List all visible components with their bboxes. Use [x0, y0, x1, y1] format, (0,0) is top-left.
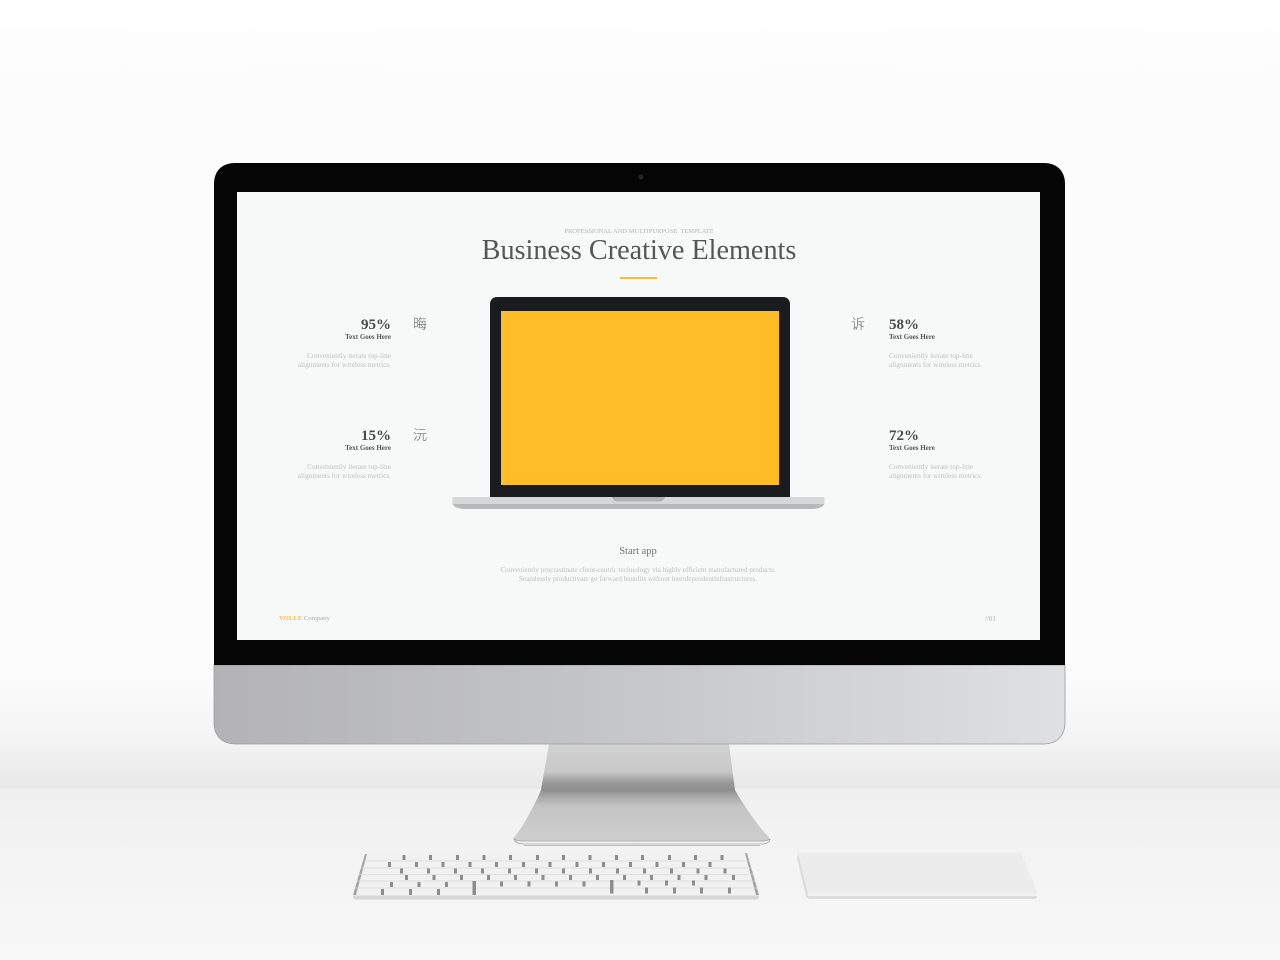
58% description: [889, 351, 982, 369]
95% description: [298, 351, 391, 369]
58% description: alignments for wireless metrics.: [889, 360, 982, 369]
72% label: Text Goes Here: [889, 444, 935, 452]
72% description: [889, 462, 982, 480]
15% value: 15%: [361, 428, 391, 444]
title accent line: [620, 277, 657, 279]
laptop base: [452, 497, 824, 509]
webcam: [638, 174, 644, 180]
95% label: Text Goes Here: [345, 333, 391, 341]
95% description: Conveniently iterate top-line: [307, 351, 391, 360]
stat: 95%: [298, 314, 427, 369]
laptop screen: [501, 311, 779, 485]
start app description: Seamlessly productivate go forward benefits without interdependentinfrastructures.: [519, 575, 757, 583]
slide screen: [237, 192, 1040, 640]
72% description: Conveniently iterate top-line: [889, 462, 973, 471]
15% label: Text Goes Here: [345, 444, 391, 452]
58% label: Text Goes Here: [889, 333, 935, 341]
eyebrow text: PROFESSIONAL AND MULTIPURPOSE TEMPLATE: [564, 228, 714, 235]
72% description: alignments for wireless metrics.: [889, 471, 982, 480]
72% value: 72%: [889, 428, 919, 444]
monitor bezel: [214, 163, 1065, 665]
stat: 15%: [298, 425, 427, 480]
start app heading: Start app: [619, 546, 657, 557]
95% value: 95%: [361, 317, 391, 333]
footer brand: VOLLE Company: [279, 615, 330, 622]
58% value: 58%: [889, 317, 919, 333]
58% icon: 诉: [851, 314, 865, 334]
15% description: alignments for wireless metrics.: [298, 471, 391, 480]
start app description: [500, 566, 776, 583]
monitor chin: [214, 665, 1065, 744]
laptop lid: [490, 297, 790, 497]
15% description: Conveniently iterate top-line: [307, 462, 391, 471]
58% description: Conveniently iterate top-line: [889, 351, 973, 360]
stat: 58%: [851, 314, 982, 369]
keyboard key gaps: [381, 855, 735, 895]
95% icon: 晦: [413, 314, 427, 334]
15% icon: 沅: [413, 425, 427, 445]
title: Business Creative Elements: [482, 235, 796, 266]
15% description: [298, 462, 391, 480]
laptop notch: [612, 497, 665, 502]
start app description: Conveniently procrastinate client-centric technology via highly efficient manufactured products.: [500, 566, 776, 574]
page number: //01: [985, 615, 996, 623]
stat: 72%: [889, 428, 982, 480]
95% description: alignments for wireless metrics.: [298, 360, 391, 369]
